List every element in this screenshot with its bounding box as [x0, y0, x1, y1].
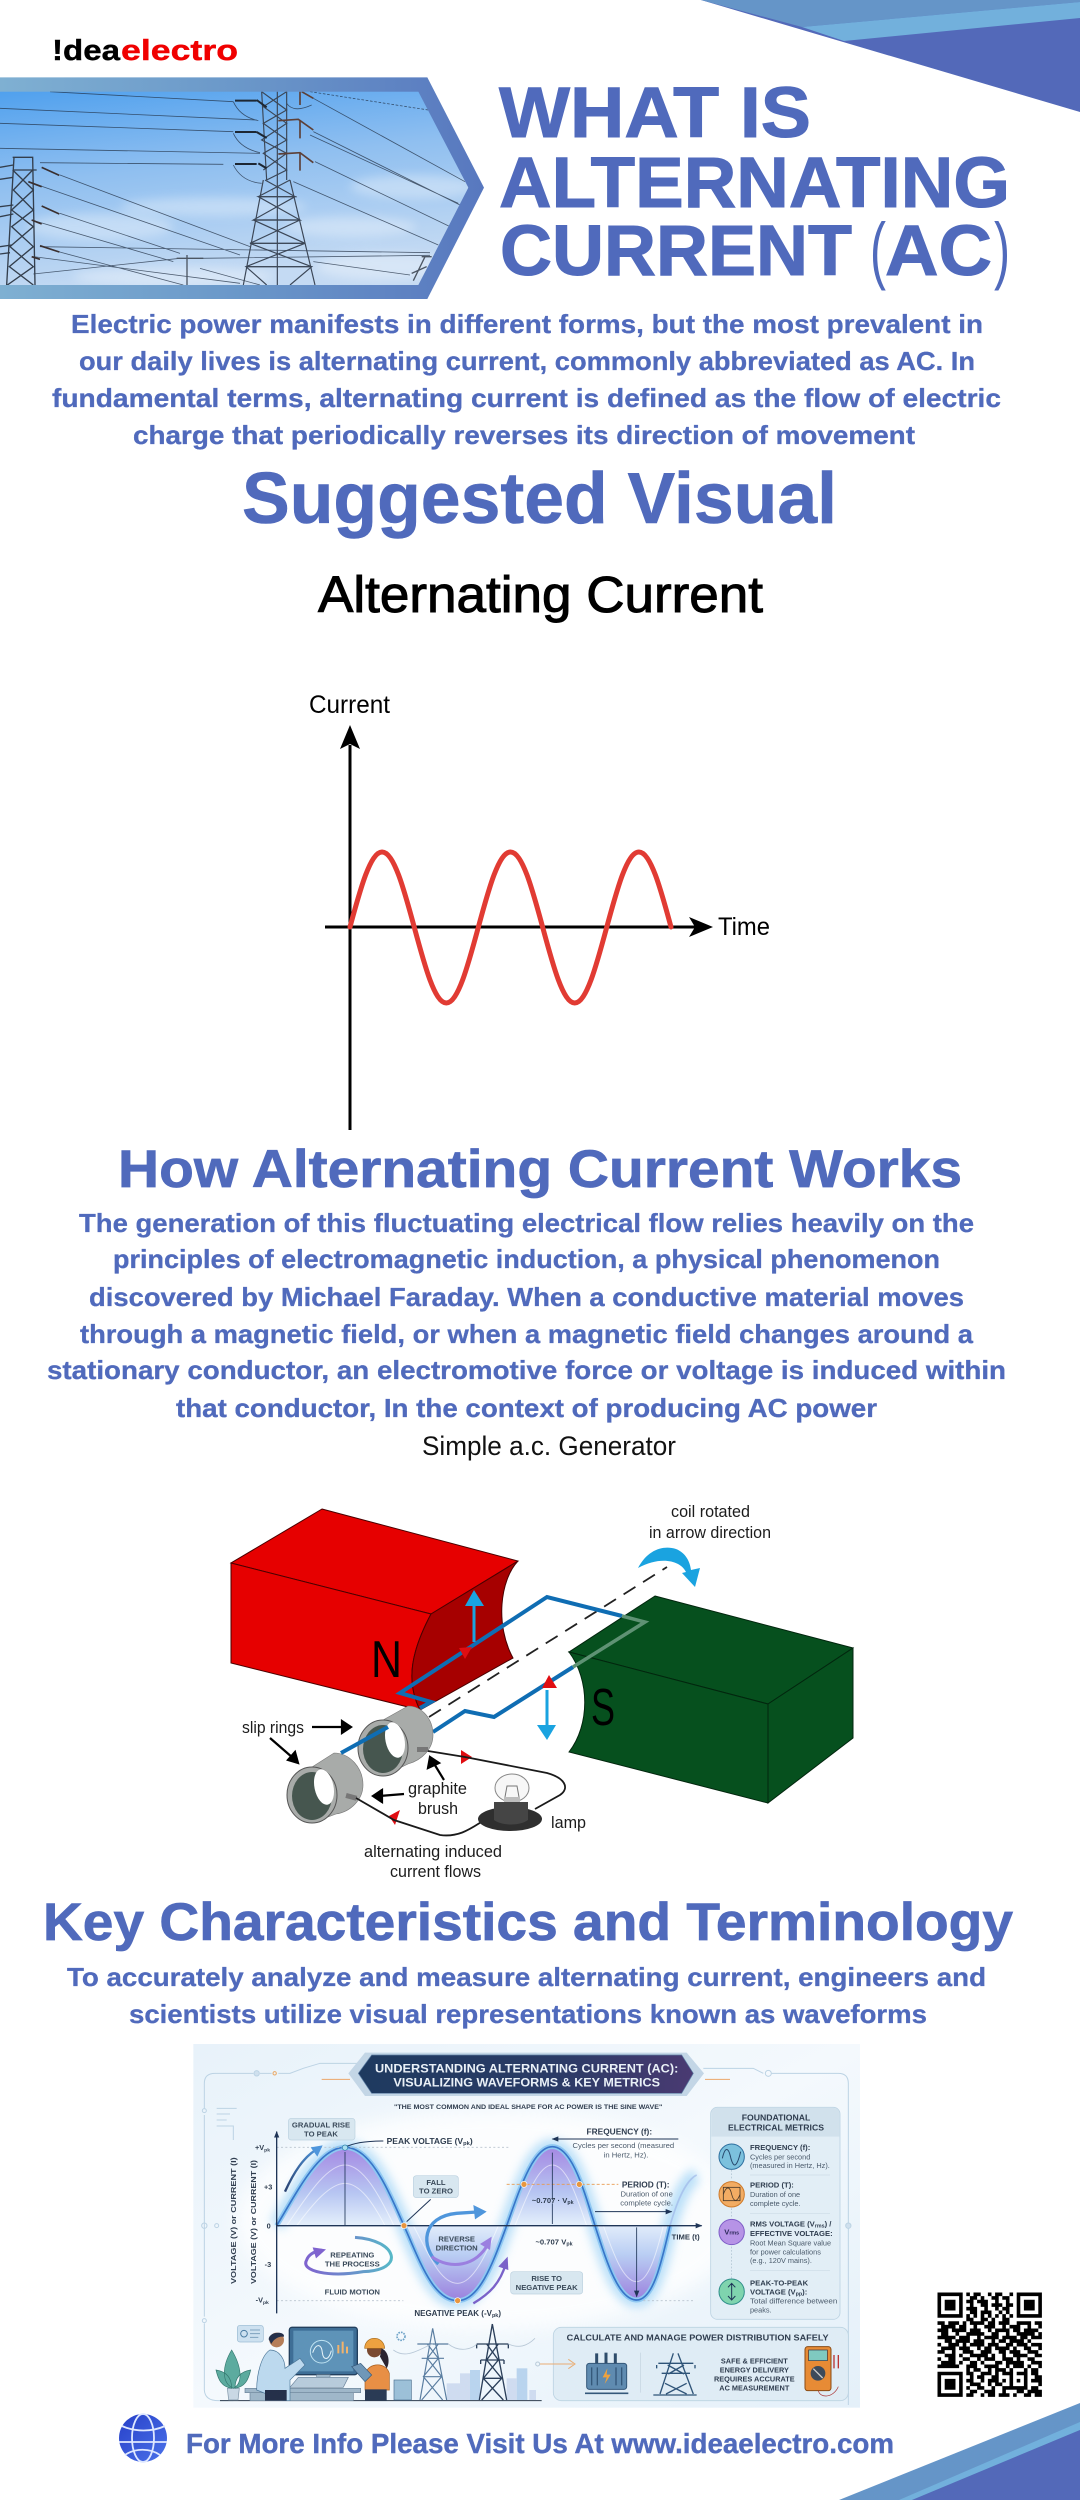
- illustration: engineers, monitor, towers: [216, 2324, 542, 2401]
- panel: foundational electrical metrics: [711, 2107, 840, 2319]
- north magnet block: [231, 1509, 518, 1710]
- y axis ticks: +V: [255, 2143, 264, 2152]
- current direction markers: [389, 1647, 557, 1825]
- panel: foundational electrical metrics: complete cycle.: [750, 2199, 801, 2208]
- panel: foundational electrical metrics: ) /: [825, 2220, 832, 2229]
- paragraph: how ac works: stationary conductor, an electromotive force or voltage is induced within: [47, 1355, 1006, 1385]
- subtitle: "THE MOST COMMON AND IDEAL SHAPE FOR AC POWER IS THE SINE WAVE": [394, 2104, 662, 2111]
- callouts: RISE TO: [531, 2274, 562, 2283]
- transmission towers and city: [393, 2324, 536, 2400]
- banner photo: power transmission towers: [0, 77, 484, 299]
- icon: transformer: [585, 2353, 628, 2393]
- chart annotations: FREQUENCY (f):: [587, 2127, 652, 2137]
- panel: foundational electrical metrics: ELECTRICAL METRICS: [728, 2123, 824, 2133]
- y axis ticks: pk: [264, 2147, 270, 2153]
- title: what is alternating current (ac): ALTERNATING: [499, 144, 1010, 223]
- panel: foundational electrical metrics: FOUNDATIONAL: [742, 2112, 811, 2122]
- panel: foundational electrical metrics: rms: [815, 2224, 825, 2230]
- metric icon: peak to peak: [719, 2279, 744, 2304]
- plant: [216, 2350, 251, 2400]
- callouts: REPEATING: [330, 2250, 374, 2259]
- y axis ticks: -3: [265, 2260, 271, 2269]
- chart annotations: pk: [463, 2141, 471, 2147]
- connector arrow: [536, 2359, 575, 2369]
- axis label: time: Time: [718, 913, 770, 941]
- chart annotations: PERIOD (T):: [622, 2179, 669, 2189]
- title: what is alternating current (ac): [499, 74, 1010, 291]
- icon: multimeter: [805, 2347, 838, 2396]
- logo: ideaelectro: [52, 35, 238, 67]
- callouts: DIRECTION: [436, 2244, 478, 2253]
- chart annotations: ): [470, 2136, 473, 2146]
- panel: foundational electrical metrics: Root Mean Square value: [750, 2239, 831, 2248]
- panel: foundational electrical metrics: PEAK-TO-PEAK: [750, 2278, 809, 2287]
- label: graphite brush: graphite: [408, 1779, 467, 1798]
- paragraph: how ac works: through a magnetic field, or when a magnetic field changes around a: [80, 1319, 974, 1349]
- panel: foundational electrical metrics: Cycles per second: [750, 2152, 810, 2161]
- paragraph: waveforms intro: scientists utilize visual representations known as waveforms: [129, 1999, 927, 2029]
- panel: foundational electrical metrics: VOLTAGE (V: [750, 2287, 796, 2296]
- panel: calculate and manage power distribution: REQUIRES ACCURATE: [714, 2374, 795, 2383]
- chart annotations: NEGATIVE PEAK (-V: [414, 2308, 495, 2318]
- pole letter s: S: [591, 1679, 615, 1737]
- rotated y axis labels: VOLTAGE (V) or CURRENT (I): [249, 2159, 258, 2284]
- chart annotations: PEAK VOLTAGE (V: [387, 2136, 462, 2146]
- label: lamp: lamp: [551, 1813, 586, 1832]
- title: what is alternating current (ac): ): [994, 208, 1010, 291]
- heading: how alternating current works: How Alternating Current Works: [118, 1140, 962, 1199]
- panel: foundational electrical metrics: ):: [802, 2287, 807, 2296]
- south magnet block: [569, 1596, 853, 1803]
- diagram: simple ac generator: [231, 1502, 853, 1881]
- pole letter n: N: [371, 1631, 402, 1689]
- callouts: THE PROCESS: [325, 2260, 380, 2269]
- diagram title: simple a.c. generator: Simple a.c. Generator: [422, 1431, 676, 1461]
- callouts: [288, 2118, 583, 2296]
- panel: calculate and manage power distribution: CALCULATE AND MANAGE POWER DISTRIBUTION SAFELY: [567, 2332, 829, 2342]
- y axis ticks: [255, 2143, 272, 2306]
- heading: suggested visual: Suggested Visual: [242, 459, 837, 539]
- lamp: [478, 1774, 542, 1831]
- label: alternating induced current flows: current flows: [390, 1862, 481, 1881]
- chart annotations: pk: [492, 2313, 499, 2319]
- slip ring rear: [358, 1706, 433, 1776]
- x axis with arrow: [325, 917, 713, 937]
- monitor and desk: [245, 2327, 361, 2401]
- title ribbon: VISUALIZING WAVEFORMS & KEY METRICS: [393, 2076, 660, 2090]
- panel: foundational electrical metrics: pp: [796, 2291, 803, 2297]
- chart annotations: TIME (t): [672, 2232, 700, 2241]
- panel: foundational electrical metrics: EFFECTIVE VOLTAGE:: [750, 2229, 833, 2238]
- callouts: REVERSE: [438, 2235, 475, 2244]
- intro paragraph: fundamental terms, alternating current is defined as the flow of electric: [52, 383, 1001, 413]
- red sine wave: [350, 852, 671, 1003]
- chart: sine wave of current over time: [309, 691, 770, 1130]
- chart annotations: Cycles per second (measured: [572, 2141, 674, 2150]
- chart annotations: Duration of one: [620, 2190, 673, 2199]
- decoration: bottom-right corner triangles: [839, 2403, 1080, 2500]
- coil lead to front slip ring: [341, 1727, 388, 1753]
- metric icon: period: [719, 2182, 744, 2207]
- label: alternating induced current flows: [364, 1842, 502, 1881]
- callouts: FALL: [426, 2178, 446, 2187]
- callouts: TO PEAK: [304, 2129, 338, 2138]
- flow arrows: [285, 2145, 508, 2303]
- chart annotations: in Hertz, Hz).: [604, 2150, 648, 2159]
- logo: ideaelectro: !dea: [52, 35, 121, 67]
- intro paragraph: [52, 309, 1001, 450]
- rotated y axis labels: [229, 2157, 258, 2284]
- chart annotations: ): [498, 2308, 501, 2318]
- chart annotations: ~0.707 V: [535, 2238, 566, 2247]
- intro paragraph: our daily lives is alternating current, commonly abbreviated as AC. In: [79, 346, 975, 376]
- panel: foundational electrical metrics: (measured in Hertz, Hz).: [750, 2161, 830, 2170]
- chart annotations: pk: [566, 2242, 573, 2248]
- metric icon: rms: [719, 2219, 744, 2245]
- dashed rotation axis: [429, 1567, 667, 1717]
- callouts: GRADUAL RISE: [292, 2120, 350, 2129]
- paragraph: how ac works: The generation of this fluctuating electrical flow relies heavily on the: [79, 1208, 974, 1238]
- engineer: [257, 2333, 305, 2401]
- title: what is alternating current (ac): CURRENT: [500, 212, 852, 291]
- chart annotations: pk: [567, 2200, 574, 2206]
- footer: website call to action: For More Info Please Visit Us At www.ideaelectro.com: [186, 2428, 894, 2459]
- force arrow up: [465, 1590, 484, 1642]
- title: what is alternating current (ac): WHAT IS: [499, 74, 811, 153]
- panel: foundational electrical metrics: PERIOD (T):: [750, 2181, 794, 2190]
- paragraph: how ac works: [47, 1208, 1006, 1423]
- label: coil rotated in arrow direction: coil rotated: [671, 1502, 750, 1521]
- circuit trace decoration: [202, 2063, 851, 2405]
- rotated y axis labels: VOLTAGE (V) or CURRENT (I): [229, 2157, 238, 2284]
- paragraph: how ac works: principles of electromagnetic induction, a physical phenomenon: [113, 1244, 940, 1274]
- y axis with arrow: [340, 725, 360, 1130]
- intro paragraph: Electric power manifests in different forms, but the most prevalent in: [71, 309, 983, 339]
- panel: foundational electrical metrics: Duration of one: [750, 2190, 800, 2199]
- title ribbon: [348, 2053, 704, 2096]
- panel: foundational electrical metrics: for power calculations: [750, 2247, 821, 2256]
- coil segment behind south magnet: [573, 1616, 645, 1667]
- panel: waveform infographic: [193, 2044, 860, 2408]
- intro paragraph: charge that periodically reverses its direction of movement: [133, 420, 915, 450]
- label: alternating induced current flows: alternating induced: [364, 1842, 502, 1861]
- chart annotations: complete cycle.: [620, 2198, 673, 2207]
- icon: globe: [119, 2414, 167, 2462]
- metric icon: frequency: [719, 2144, 744, 2169]
- chart annotations: ~0.707 · V: [532, 2196, 567, 2205]
- label: graphite brush: [408, 1779, 467, 1818]
- coil wire: [400, 1597, 622, 1732]
- callouts: FLUID MOTION: [325, 2287, 380, 2296]
- panel: foundational electrical metrics: RMS VOLTAGE (V: [750, 2220, 815, 2229]
- chart title: alternating current: Alternating Current: [318, 566, 763, 623]
- icon: pylon: [653, 2353, 697, 2395]
- y axis ticks: 0: [267, 2221, 271, 2230]
- title: what is alternating current (ac): (: [870, 208, 886, 291]
- y axis ticks: pk: [263, 2300, 269, 2306]
- speech icon: [237, 2325, 263, 2342]
- paragraph: how ac works: discovered by Michael Faraday. When a conductive material moves: [89, 1282, 964, 1312]
- metric icon: rms: Vrms: [724, 2228, 739, 2237]
- paragraph: waveforms intro: To accurately analyze and measure alternating current, engineers and: [67, 1962, 986, 1992]
- label: graphite brush: brush: [418, 1799, 458, 1818]
- force arrow down: [537, 1690, 556, 1740]
- panel: calculate and manage power distribution: SAFE & EFFICIENT: [721, 2357, 788, 2366]
- y axis ticks: -V: [256, 2296, 263, 2305]
- panel: foundational electrical metrics: (e.g., 120V mains).: [750, 2256, 812, 2265]
- rotation arrow: [638, 1548, 700, 1587]
- logo: ideaelectro: electro: [121, 35, 238, 67]
- callouts: TO ZERO: [419, 2187, 453, 2196]
- y axis ticks: +3: [264, 2182, 272, 2191]
- label: slip rings: slip rings: [242, 1718, 304, 1737]
- panel: foundational electrical metrics: FREQUENCY (f):: [750, 2143, 810, 2152]
- axis label: current: Current: [309, 691, 390, 719]
- panel: calculate and manage power distribution: AC MEASUREMENT: [719, 2383, 790, 2392]
- panel: foundational electrical metrics: peaks.: [750, 2306, 772, 2315]
- label: coil rotated in arrow direction: [649, 1502, 771, 1542]
- callouts: NEGATIVE PEAK: [516, 2283, 578, 2292]
- chart annotations: [387, 2127, 700, 2319]
- label: coil rotated in arrow direction: in arrow direction: [649, 1523, 771, 1542]
- paragraph: how ac works: that conductor, In the context of producing AC power: [176, 1393, 877, 1423]
- slip ring front: [287, 1753, 363, 1823]
- qr code: [938, 2294, 1042, 2395]
- panel: foundational electrical metrics: Total difference between: [750, 2297, 837, 2306]
- panel: calculate and manage power distribution: [553, 2327, 848, 2401]
- decoration: top-right corner triangles: [701, 0, 1080, 112]
- panel: calculate and manage power distribution: ENERGY DELIVERY: [720, 2365, 789, 2374]
- title: what is alternating current (ac): AC: [885, 212, 992, 291]
- waveform chart: [277, 2132, 702, 2313]
- field worker: [352, 2338, 389, 2401]
- heading: key characteristics and terminology: Key Characteristics and Terminology: [43, 1893, 1014, 1952]
- lamp wires: [356, 1751, 565, 1835]
- paragraph: waveforms intro: [67, 1962, 986, 2029]
- label arrows: [270, 1721, 444, 1802]
- title ribbon: UNDERSTANDING ALTERNATING CURRENT (AC):: [375, 2061, 678, 2075]
